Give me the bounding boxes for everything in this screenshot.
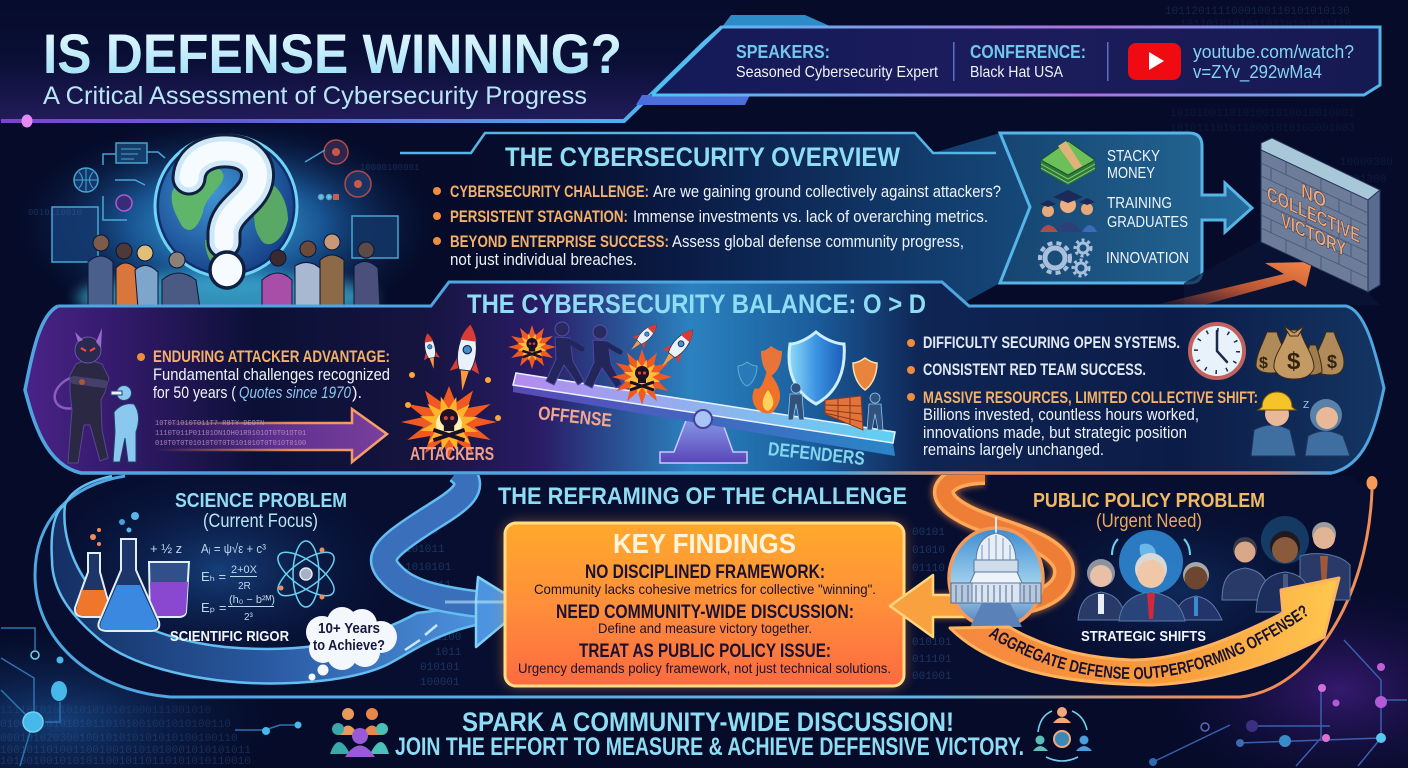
panel: cybersecurity balance (25, 282, 1384, 473)
page background: 10100100101010110010110110101010110010 (0, 756, 251, 768)
page background: 10110101010110110101011110 (1180, 19, 1352, 31)
icon: money bags: $ (1259, 355, 1268, 372)
icon: small shields and flame (738, 346, 877, 413)
label: attackers: ATTACKERS (410, 444, 494, 464)
label: training graduates: TRAINING (1107, 195, 1172, 212)
bullet: challenge: CYBERSECURITY CHALLENGE: (450, 182, 649, 201)
text: enduring attacker advantage (137, 347, 390, 402)
formulas: + ½ z (150, 541, 182, 556)
bullet: open systems: DIFFICULTY SECURING OPEN SYSTEMS. (923, 333, 1180, 352)
label: stacky money: STACKY (1107, 148, 1160, 165)
label: training graduates: GRADUATES (1107, 214, 1188, 231)
bullet: massive resources: Billions invested, countless hours worked, (923, 405, 1199, 424)
wall text: NO (1301, 180, 1326, 213)
icon: tired workers: Z (1303, 400, 1309, 411)
formulas: Aⱼ = ψ√ε + c³ (201, 541, 267, 556)
header band (0, 0, 744, 128)
section node (1366, 476, 1378, 490)
icon: graduates (1040, 190, 1097, 232)
formulas (150, 541, 275, 623)
formulas: (h₀ − b²ᴹ) (229, 594, 275, 606)
chart: seesaw balance (508, 319, 895, 470)
wall text: COLLECTIVE (1267, 183, 1360, 248)
icon: gears (1040, 240, 1091, 276)
heading: spark discussion: SPARK A COMMUNITY-WIDE DISCUSSION! (462, 707, 954, 737)
panel: cybersecurity overview (400, 133, 1252, 305)
wall text: VICTORY (1281, 209, 1346, 261)
figure: small defender (111, 386, 139, 462)
panel: reframing of the challenge (34, 473, 1378, 698)
icon: earth (155, 135, 297, 277)
finding: discussion: Define and measure victory together. (598, 620, 812, 636)
subtitle: A Critical Assessment of Cybersecurity Progress (43, 82, 587, 110)
label: stacky money: MONEY (1107, 165, 1155, 182)
heading: public policy problem: (Urgent Need) (1096, 511, 1202, 532)
finding: framework (534, 562, 876, 597)
bullet: stagnation (433, 207, 988, 226)
finding: framework: Community lacks cohesive metrics for collective "winning". (534, 581, 876, 597)
circuit lines bottom right (1149, 640, 1407, 766)
icon: attackers explosion (401, 372, 501, 459)
bullet: beyond enterprise: not just individual breaches. (450, 250, 637, 269)
page background: 1011201111000100110101010130 (1165, 6, 1350, 18)
formulas: 2R (238, 581, 251, 592)
arrow: orange toward wall (1150, 240, 1380, 306)
panel: reframing of the challenge: 00101 (912, 527, 945, 539)
figure: attacker (55, 328, 109, 463)
bullet: beyond enterprise: Assess global defense community progress, (672, 232, 964, 251)
heading: science problem: (Current Focus) (203, 511, 318, 532)
panel: reframing of the challenge: 10110 (405, 526, 438, 538)
bullet: challenge: Are we gaining ground collectively against attackers? (653, 182, 1001, 201)
icon: community cycle (1033, 707, 1092, 761)
header rule (1, 27, 722, 121)
panel: reframing of the challenge: 010101 (420, 662, 460, 674)
formulas: 2³ (244, 612, 254, 623)
icon: defender figures (788, 383, 883, 430)
page background: 0110100 (5, 36, 51, 48)
wall text (1267, 164, 1360, 268)
label: stacky money (1107, 148, 1160, 182)
youtube link: v=ZYv_292wMa4 (1193, 62, 1322, 83)
icon: lab flasks (75, 512, 189, 631)
bullet: challenge (433, 182, 1001, 201)
page background: 1010100110101001010010010001 (1170, 108, 1355, 120)
subheading: join the effort: JOIN THE EFFORT TO MEASURE & ACHIEVE DEFENSIVE VICTORY. (395, 733, 1024, 761)
page background: 1001300 (1340, 174, 1386, 186)
speakers: SPEAKERS: (736, 42, 830, 62)
bullet: massive resources: innovations made, but strategic position (923, 423, 1187, 442)
finding: policy: Urgency demands policy framework, not just technical solutions. (518, 660, 891, 676)
illustration: globe with question mark and audience: 0010110010 (28, 208, 82, 218)
heading: science problem: SCIENCE PROBLEM (175, 490, 347, 512)
heading: public policy problem: PUBLIC POLICY PROBLEM (1033, 490, 1265, 512)
key findings title: KEY FINDINGS (613, 528, 796, 559)
bullet: beyond enterprise: BEYOND ENTERPRISE SUCCESS: (450, 232, 669, 251)
title: IS DEFENSE WINNING? (43, 22, 622, 85)
page background: 11001001001001110100111101 (5, 21, 177, 33)
page background: 1010111010110001010100001003 (1170, 123, 1355, 135)
formulas: Eₚ = (201, 600, 226, 615)
call to action (330, 707, 1092, 761)
label: defenders: DEFENDERS (767, 439, 866, 470)
illustration: globe with question mark and audience: 10000100081 (360, 163, 419, 173)
panel: reframing of the challenge: 001001 (912, 671, 952, 683)
panel: reframing of the challenge: 011101 (912, 654, 952, 666)
formulas: 2+0X (231, 564, 258, 576)
icon: offense attackers (508, 319, 701, 405)
page background: 10000300 (1340, 157, 1393, 169)
youtube link: youtube.com/watch? (1193, 42, 1354, 62)
callout: thought bubble (306, 607, 397, 680)
bullet: beyond enterprise (433, 232, 964, 269)
page background: 11110101010101010101000111001010 (0, 705, 211, 717)
icon: main shield (789, 332, 844, 404)
bullet: stagnation: Immense investments vs. lack of overarching metrics. (633, 207, 988, 226)
heading: overview: THE CYBERSECURITY OVERVIEW (505, 142, 900, 172)
youtube link (1193, 42, 1354, 83)
tech icons (52, 140, 398, 262)
icon: money bags: $ (1287, 348, 1301, 375)
callout: thought bubble: to Achieve? (313, 637, 385, 654)
conference: CONFERENCE: (970, 42, 1086, 62)
text: enduring attacker advantage: Fundamental challenges recognized (153, 365, 390, 384)
heading: balance: THE CYBERSECURITY BALANCE: O > D (467, 289, 926, 319)
icon: youtube play (1128, 43, 1181, 80)
bullet: massive resources: remains largely unchanged. (923, 440, 1104, 459)
formulas: Eₕ = (201, 569, 226, 584)
bullet: stagnation: PERSISTENT STAGNATION: (450, 207, 628, 226)
panel: reframing of the challenge: 1100 (435, 632, 461, 644)
icon: stack of money (1041, 141, 1095, 185)
page background: 000101020300100101010101010100100110 (0, 733, 238, 745)
panel: reframing of the challenge: 1011 (435, 647, 462, 659)
page background: 10010110100110010010101010001010101011 (0, 745, 251, 757)
label: strategic shifts: STRATEGIC SHIFTS (1081, 628, 1206, 645)
arrow: attack direction (155, 409, 387, 462)
icon: capitol (949, 517, 1043, 628)
section border (35, 476, 1372, 697)
icon: question mark (189, 151, 258, 288)
text: enduring attacker advantage: ). (352, 383, 362, 402)
label: innovation: INNOVATION (1106, 250, 1189, 267)
bullet: massive resources (907, 388, 1258, 459)
panel: speakers and conference (636, 15, 1380, 105)
bullet: red team: CONSISTENT RED TEAM SUCCESS. (923, 360, 1146, 379)
arrow: attack direction: 1110T011P01101ON1OH01R9101OT0T01OT01 (155, 430, 306, 438)
finding: discussion: NEED COMMUNITY-WIDE DISCUSSION: (556, 602, 854, 623)
page background: 0010011100000000000111101111011111 (5, 6, 230, 18)
audience (88, 234, 380, 308)
icon: rockets (419, 323, 485, 393)
panel: resources (1000, 133, 1252, 283)
arrow: attack direction: 10T0T1010T011T7 R8TY DEOTN (155, 420, 264, 428)
text: enduring attacker advantage: Quotes since 1970 (239, 383, 351, 402)
icon: globe (1112, 530, 1190, 594)
circuit lines bottom left (1, 628, 302, 766)
panel: reframing of the challenge: 0011011 (405, 580, 452, 592)
panel: reframing of the challenge: 1010101 (405, 562, 452, 574)
panel: reframing of the challenge: 01010 (912, 545, 945, 557)
band text: AGGREGATE DEFENSE OUTPERFORMING OFFENSE? (988, 606, 1308, 680)
callout: thought bubble: 10+ Years (318, 620, 380, 637)
illustration: globe with question mark and audience (11, 117, 441, 333)
panel: key findings (505, 523, 904, 686)
finding: framework: NO DISCIPLINED FRAMEWORK: (585, 562, 825, 583)
speakers: Seasoned Cybersecurity Expert (736, 64, 938, 81)
arrow: aggregate defense band (948, 576, 1340, 686)
label: scientific rigor: SCIENTIFIC RIGOR (170, 628, 289, 645)
icon: brick wall (825, 396, 863, 430)
bullet: massive resources: MASSIVE RESOURCES, LIMITED COLLECTIVE SHIFT: (923, 388, 1258, 407)
people: strategic leaders (1078, 516, 1350, 621)
text: enduring attacker advantage: ENDURING ATTACKER ADVANTAGE: (153, 347, 390, 366)
icon: atom (272, 541, 340, 607)
header node (22, 114, 32, 128)
finding: policy: TREAT AS PUBLIC POLICY ISSUE: (579, 641, 831, 662)
text: enduring attacker advantage: for 50 years ( (153, 383, 236, 402)
label: offense: OFFENSE (537, 403, 613, 432)
arrow: science road (52, 470, 525, 683)
wall: no collective victory (1150, 138, 1380, 306)
page background: 01001010101010110101001001010100110 (0, 719, 231, 731)
arrow: attack direction: 010T0T0T01010T0T0T0101010T0T010T0100 (155, 440, 306, 448)
icon: money bags (1256, 326, 1344, 379)
heading: public policy problem (1033, 490, 1265, 532)
conference: Black Hat USA (970, 64, 1063, 81)
panel: reframing of the challenge: 100001 (420, 677, 460, 689)
label: training graduates (1107, 195, 1188, 231)
finding: policy (518, 641, 891, 676)
icon: tired workers (1251, 392, 1350, 456)
panel: reframing of the challenge: 01110 (912, 563, 945, 575)
icon: money bags: $ (1327, 352, 1337, 372)
arrow: policy road to findings (890, 474, 1064, 637)
speakers (736, 42, 938, 81)
icon: community group (330, 708, 389, 757)
heading: science problem (175, 490, 347, 532)
finding: discussion (556, 602, 854, 636)
panel: reframing of the challenge: 101011 (405, 544, 445, 556)
icon: clock (1190, 324, 1244, 378)
heading: reframing: THE REFRAMING OF THE CHALLENGE (498, 483, 907, 510)
panel: reframing of the challenge: 010101 (912, 637, 952, 649)
conference (970, 42, 1086, 81)
